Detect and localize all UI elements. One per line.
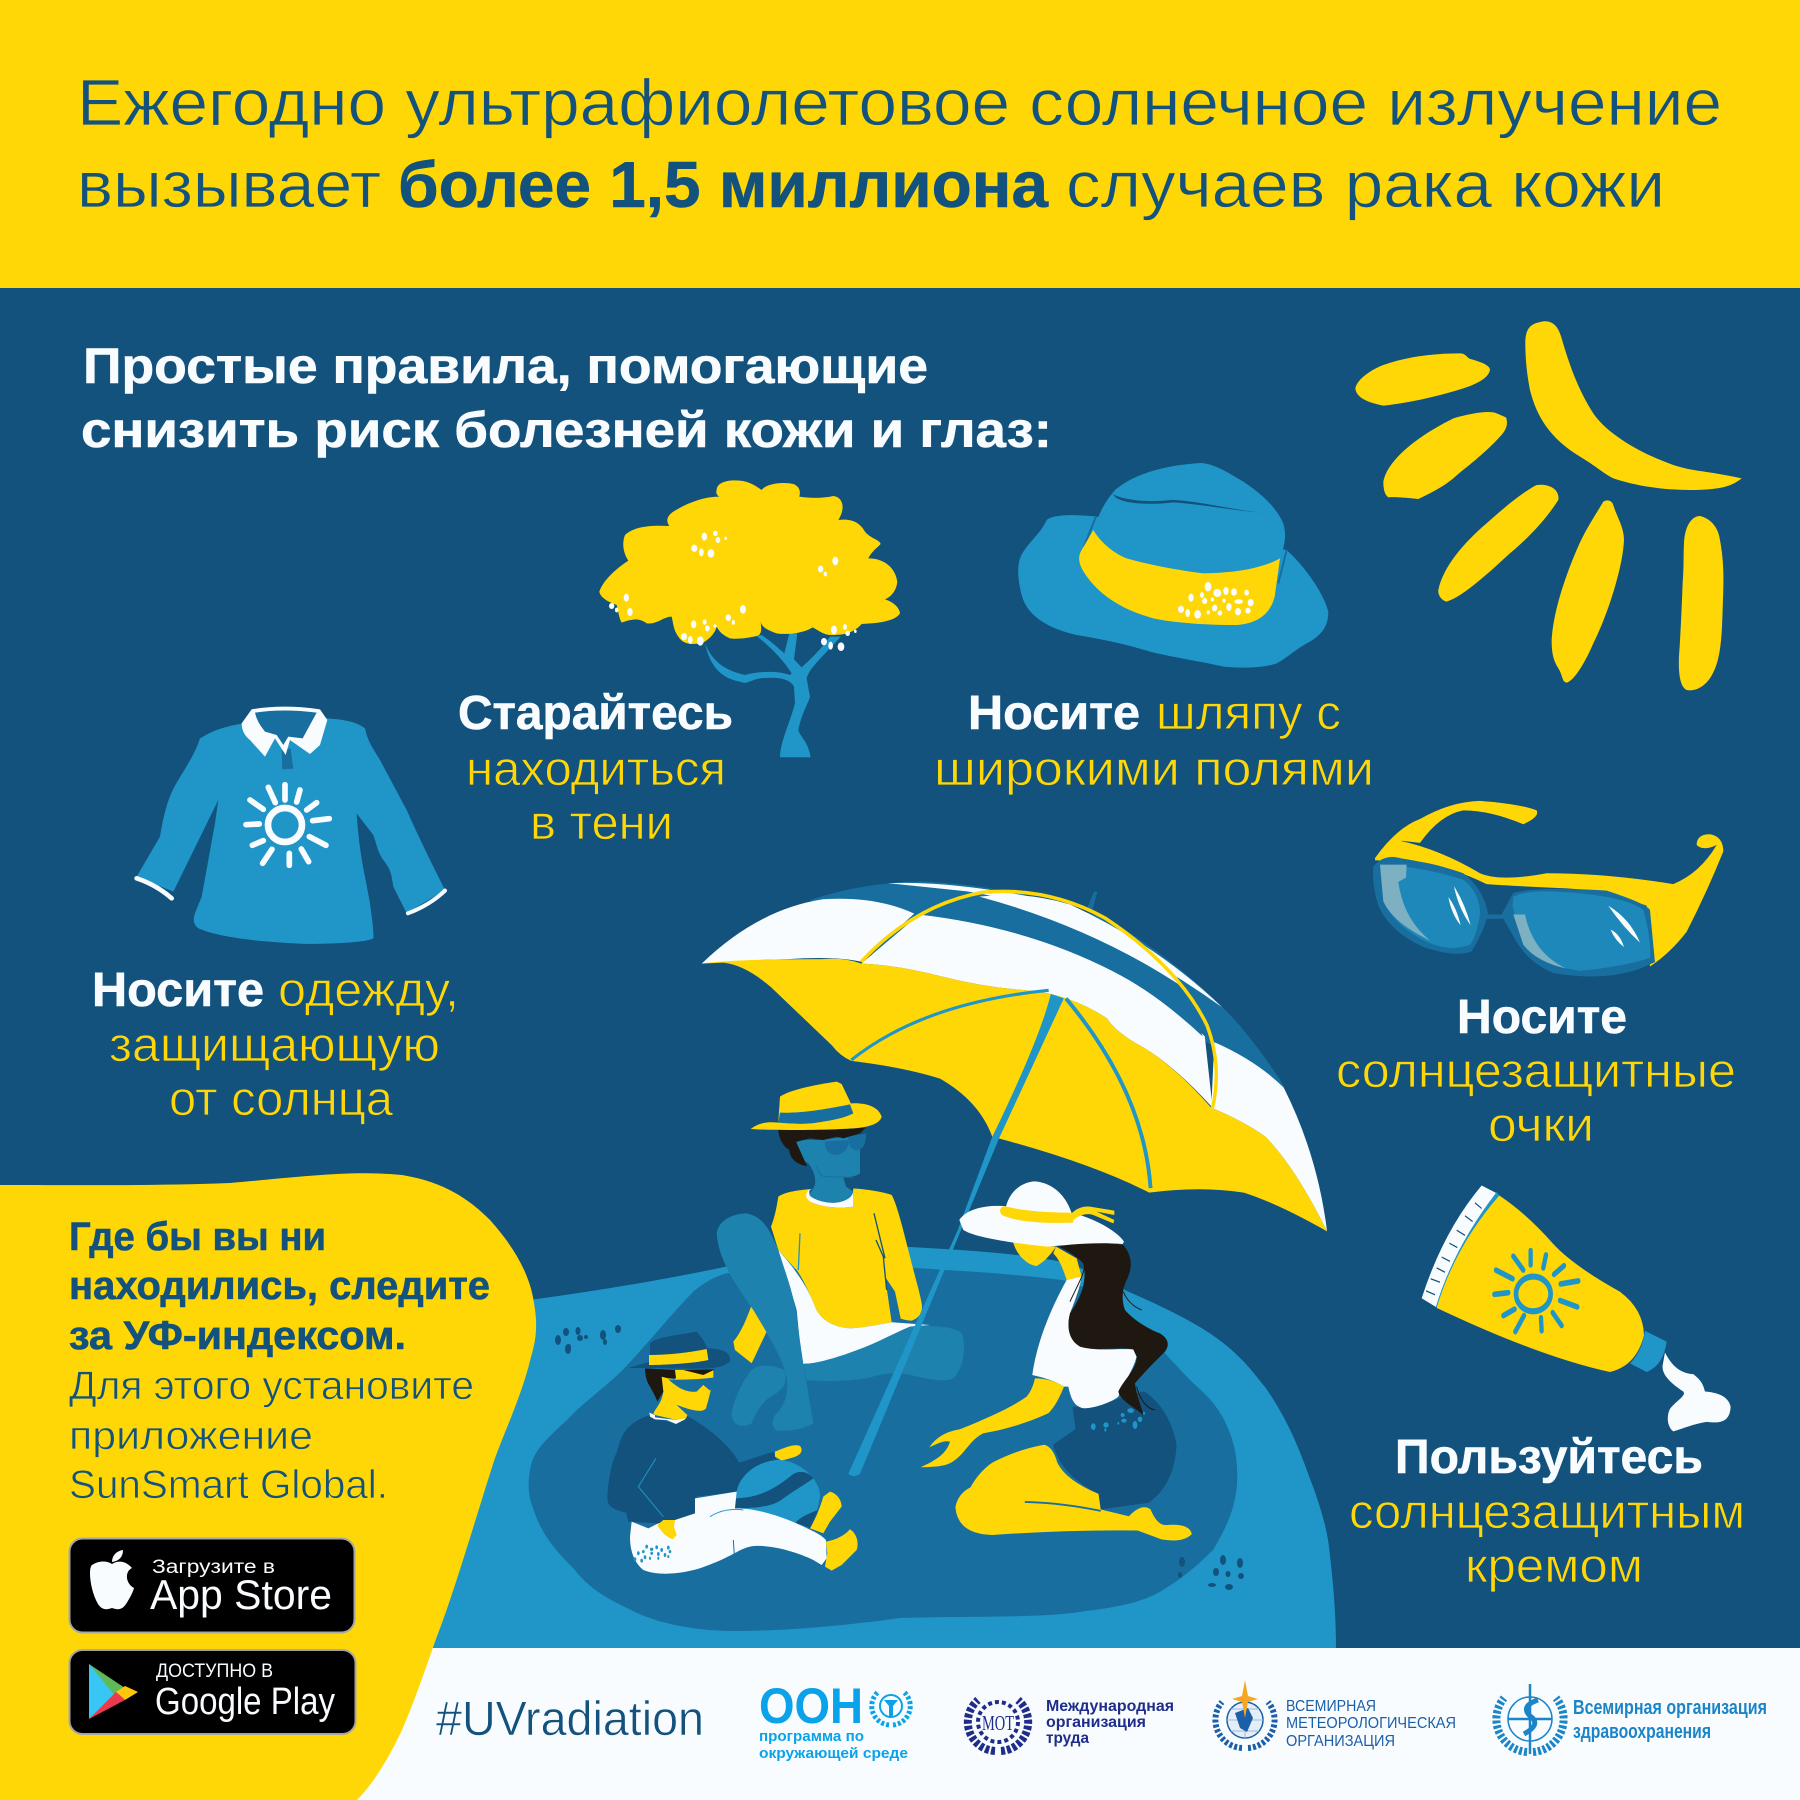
text: wear clothing: от солнца (169, 1073, 393, 1126)
badge: Google Play: Google Play (155, 1681, 335, 1723)
logo: WMO: МЕТЕОРОЛОГИЧЕСКАЯ (1286, 1715, 1456, 1732)
badge: App Store: App Store (150, 1571, 332, 1618)
umbrella pole (848, 994, 1064, 1476)
heading: simple rules: Простые правила, помогающие (83, 338, 928, 394)
text: wear clothing: Носите (92, 964, 264, 1017)
title: Ежегодно ультрафиолетовое солнечное излучение (77, 66, 1722, 139)
hashtag: #UVradiation (436, 1693, 704, 1746)
text: use sunscreen (1349, 1431, 1745, 1593)
title: более 1,5 миллиона (398, 148, 1049, 221)
text: wear a hat: широкими полями (934, 743, 1374, 796)
panel: white footer band (340, 1648, 1800, 1800)
icon: apple (90, 1550, 134, 1609)
icon: sunglasses (1373, 801, 1723, 976)
text: UV index call to action: Для этого установите (69, 1364, 474, 1408)
text: wear sunglasses: очки (1488, 1099, 1594, 1152)
icon: sunscreen tube (1422, 1186, 1731, 1431)
text: UV index call to action: находились, следите (69, 1264, 490, 1308)
badge: Google Play: ДОСТУПНО В (156, 1661, 273, 1682)
beach ground: darker towel (529, 1267, 1237, 1631)
woman: shorts and leg (955, 1391, 1192, 1540)
badge: App Store (70, 1538, 354, 1632)
heading: simple rules: снизить риск болезней кожи и глаз: (81, 402, 1052, 458)
pebbles: right cluster (1178, 1555, 1244, 1590)
text: use sunscreen: кремом (1465, 1540, 1643, 1593)
logo: UN Environment Programme: окружающей среде (759, 1745, 908, 1762)
logo: ILO: организация (1046, 1714, 1146, 1731)
logo: ILO: МОТ (982, 1711, 1014, 1735)
text: seek shade (458, 687, 733, 850)
heading: simple rules (81, 338, 1052, 458)
beach umbrella canopy (702, 881, 1327, 1231)
illustration: family under umbrella (607, 881, 1327, 1574)
logo: ILO: труда (1046, 1730, 1089, 1747)
text: wear a hat: Носите (968, 687, 1140, 740)
logo: WMO: ВСЕМИРНАЯ (1286, 1698, 1376, 1715)
panel: main dark blue background (0, 288, 1800, 1648)
logo: ILO: Международная (1046, 1698, 1174, 1715)
badge: Google Play (70, 1650, 356, 1734)
title: случаев рака кожи (1066, 148, 1665, 221)
pebbles: left cluster (555, 1325, 621, 1354)
logo: WHO: здравоохранения (1573, 1721, 1711, 1743)
text: wear sunglasses: солнцезащитные (1336, 1045, 1736, 1098)
text: wear sunglasses: Носите (1457, 991, 1627, 1044)
logo: WHO (1496, 1684, 1767, 1754)
panel: yellow UV index blob (0, 1173, 536, 1800)
logo: UN Environment Programme: программа по (759, 1728, 864, 1745)
text: UV index call to action: SunSmart Global. (69, 1463, 388, 1507)
logo: UN Environment Programme: ООН (759, 1678, 863, 1734)
logo: WMO: ОРГАНИЗАЦИЯ (1286, 1733, 1395, 1750)
man in hat (717, 1082, 964, 1431)
text: wear a hat: шляпу с (1156, 687, 1341, 740)
text: UV index call to action: приложение (69, 1414, 313, 1458)
text: UV index call to action: за УФ-индексом. (69, 1314, 406, 1358)
text: UV index call to action: Где бы вы ни (69, 1215, 326, 1259)
woman in white hat (921, 1181, 1192, 1540)
panel: yellow header band (0, 0, 1800, 288)
text: wear a hat (934, 687, 1374, 796)
icon: sun rays (1355, 321, 1742, 690)
logo: UN Environment Programme (759, 1678, 910, 1762)
text: wear clothing: защищающую (109, 1019, 440, 1072)
text: use sunscreen: солнцезащитным (1349, 1486, 1745, 1539)
title: вызывает (77, 148, 381, 221)
logo: WMO (1215, 1680, 1456, 1750)
woman: upper body (921, 1181, 1168, 1467)
icon: play triangle (89, 1664, 138, 1719)
text: wear sunglasses (1336, 991, 1736, 1152)
text: UV index call to action (69, 1215, 490, 1507)
text: wear clothing (92, 964, 459, 1126)
badge: App Store: Загрузите в (152, 1557, 275, 1578)
icon: tree (599, 480, 900, 757)
text: seek shade: находиться (466, 743, 726, 796)
text: seek shade: Старайтесь (458, 687, 733, 740)
text: wear clothing: одежду, (278, 964, 459, 1017)
logo: ILO (968, 1698, 1174, 1751)
boy with ball (607, 1332, 858, 1574)
text: use sunscreen: Пользуйтесь (1395, 1431, 1703, 1484)
text: seek shade: в тени (530, 797, 673, 850)
title (77, 66, 1722, 221)
icon: wide-brim hat (1018, 463, 1328, 668)
icon: long-sleeved shirt (137, 707, 445, 944)
beach ground: light blue (420, 1247, 1336, 1650)
